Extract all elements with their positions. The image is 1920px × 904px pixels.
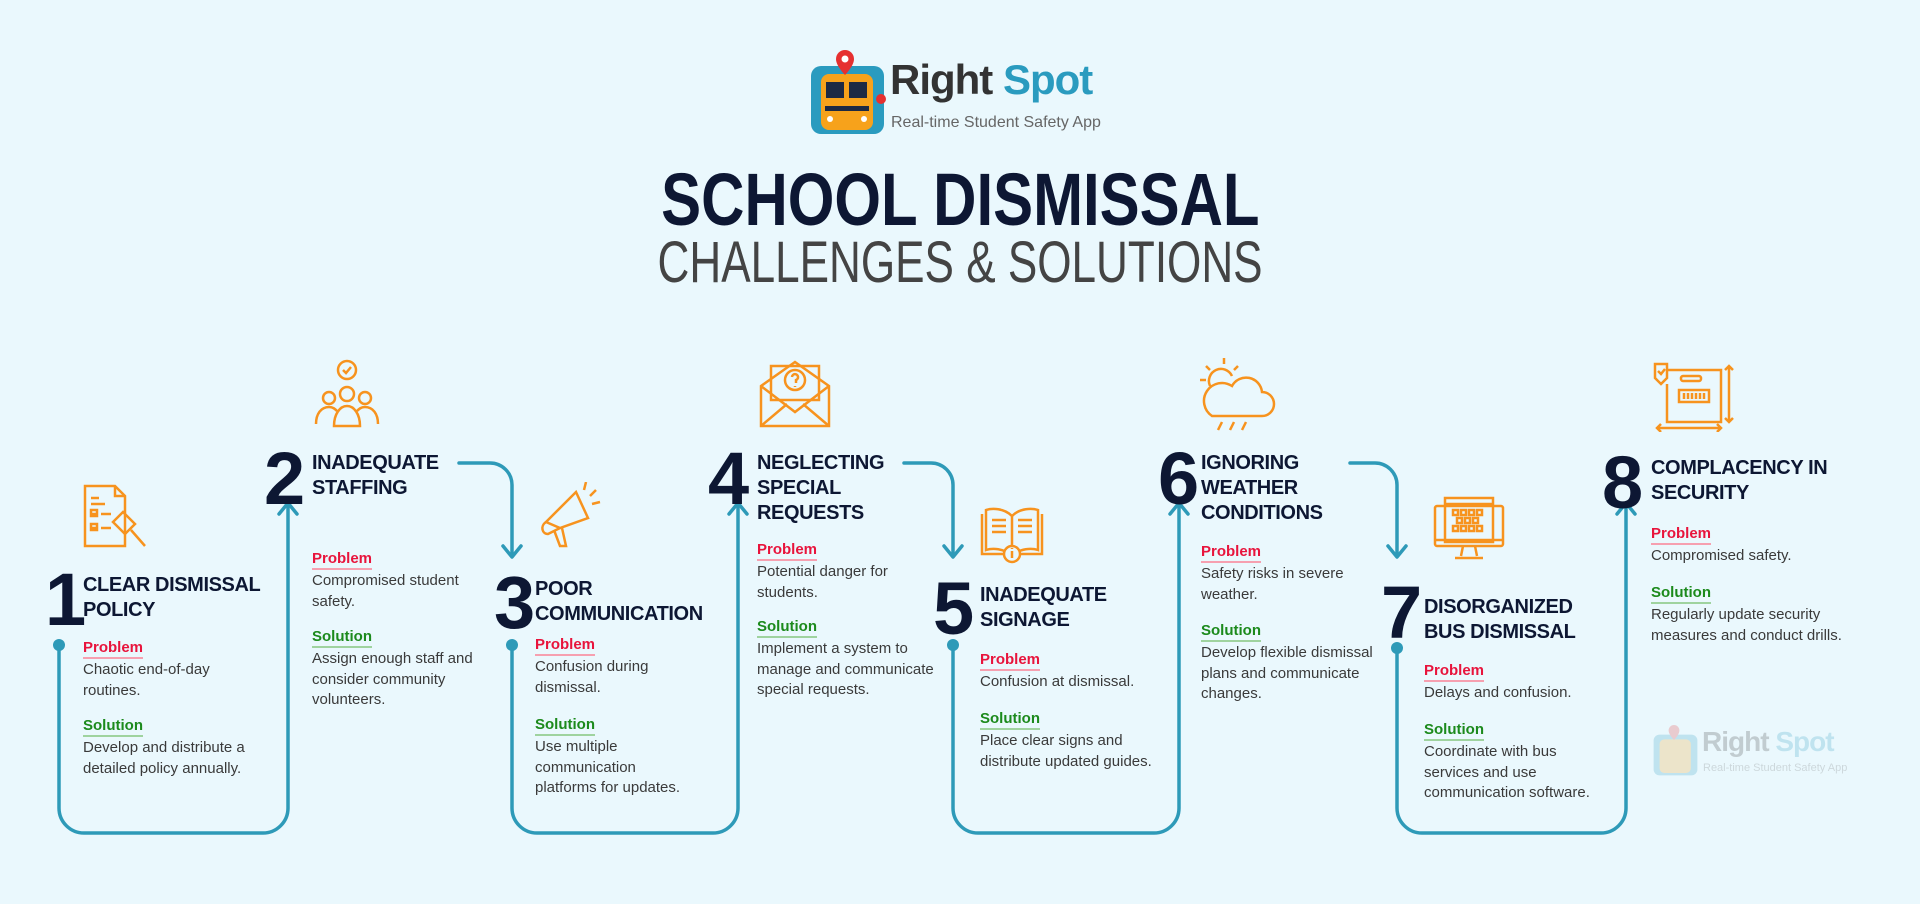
panel: 7 disorganized bus dismissal: Coordinate with bus xyxy=(1424,743,1557,760)
problem & solution xyxy=(83,639,210,698)
number 7: 7 xyxy=(1381,571,1422,654)
problem & solution xyxy=(1201,543,1344,602)
panel: 6 ignoring weather conditions: changes. xyxy=(1201,685,1262,702)
heading xyxy=(535,578,703,625)
heading xyxy=(1424,596,1576,643)
panel: 1 clear dismissal policy: Develop and distribute a xyxy=(83,739,245,756)
panel: 1 clear dismissal policy: detailed policy annually. xyxy=(83,760,241,776)
panel: 3 poor communication: Solution xyxy=(535,716,595,733)
problem & solution: Problem xyxy=(312,550,372,567)
number 4: 4 xyxy=(708,437,749,520)
panel: 5 inadequate signage: distribute updated guides. xyxy=(980,752,1152,770)
icon: team xyxy=(314,360,380,428)
watermark logo xyxy=(1654,725,1847,776)
panel: 6 ignoring weather conditions: plans and communicate xyxy=(1201,664,1359,682)
icon: policy document xyxy=(84,484,146,548)
heading: STAFFING xyxy=(312,477,407,499)
icon: envelope question xyxy=(760,360,830,428)
heading: DISORGANIZED xyxy=(1424,596,1573,618)
number 3: 3 xyxy=(494,561,535,644)
problem & solution: Safety risks in severe xyxy=(1201,565,1344,582)
problem & solution: Problem xyxy=(1201,543,1261,560)
problem & solution xyxy=(980,651,1134,690)
heading: NEGLECTING xyxy=(757,452,884,474)
watermark logo: Right Spot xyxy=(1702,726,1834,757)
panel: 8 complacency in security: measures and conduct drills. xyxy=(1651,626,1842,644)
panel: 4 neglecting special requests: special requests. xyxy=(757,681,870,698)
problem & solution: Potential danger for xyxy=(757,563,888,580)
heading: SIGNAGE xyxy=(980,609,1069,631)
heading: CLEAR DISMISSAL xyxy=(83,574,260,596)
icon: megaphone xyxy=(541,482,600,548)
subtitle: CHALLENGES & SOLUTIONS xyxy=(657,230,1263,295)
heading: WEATHER xyxy=(1201,477,1298,499)
problem & solution: Compromised safety. xyxy=(1651,547,1792,564)
problem & solution xyxy=(757,541,888,600)
problem & solution: Delays and confusion. xyxy=(1424,684,1572,701)
problem & solution xyxy=(535,636,648,696)
panel: 2 inadequate staffing: Assign enough staff and xyxy=(312,650,473,667)
panel: 4 neglecting special requests: manage and communicate xyxy=(757,660,934,678)
panel: 3 poor communication: platforms for updates. xyxy=(535,779,680,796)
panel: 5 inadequate signage: Solution xyxy=(980,710,1040,727)
brand name: Right Spot xyxy=(890,56,1092,103)
heading: POLICY xyxy=(83,599,155,621)
panel: 4 neglecting special requests: Implement a system to xyxy=(757,640,908,657)
icon: book xyxy=(980,508,1044,564)
panel: 2 inadequate staffing: Solution xyxy=(312,628,372,645)
problem & solution: weather. xyxy=(1201,586,1258,602)
number 5: 5 xyxy=(933,567,974,650)
heading: CONDITIONS xyxy=(1201,502,1323,524)
problem & solution xyxy=(312,550,459,610)
panel: 7 disorganized bus dismissal: services and use xyxy=(1424,764,1537,780)
problem & solution: Problem xyxy=(1424,662,1484,679)
panel: 4 neglecting special requests: Solution xyxy=(757,618,817,635)
panel: 6 ignoring weather conditions: Solution xyxy=(1201,622,1261,639)
panel: 2 inadequate staffing: consider community xyxy=(312,670,445,688)
heading xyxy=(1201,452,1323,524)
panel: 8 complacency in security: Solution xyxy=(1651,584,1711,601)
number 8: 8 xyxy=(1602,441,1643,524)
logo xyxy=(811,50,1101,134)
problem & solution: routines. xyxy=(83,682,141,698)
problem & solution: students. xyxy=(757,584,818,600)
tagline: Real-time Student Safety App xyxy=(891,114,1101,131)
problem & solution: Chaotic end-of-day xyxy=(83,661,210,678)
heading: INADEQUATE xyxy=(312,452,439,474)
title: SCHOOL DISMISSAL xyxy=(661,158,1259,241)
heading: SECURITY xyxy=(1651,482,1749,504)
panel: 7 disorganized bus dismissal: Solution xyxy=(1424,721,1484,738)
heading: COMPLACENCY IN xyxy=(1651,457,1827,479)
heading xyxy=(757,452,884,524)
number 1: 1 xyxy=(45,558,86,641)
panel: 6 ignoring weather conditions xyxy=(1158,358,1373,702)
icon: security panel xyxy=(1654,362,1734,432)
heading: IGNORING xyxy=(1201,452,1299,474)
panel: 2 inadequate staffing xyxy=(264,360,473,708)
panel: 8 complacency in security: Regularly update security xyxy=(1651,606,1820,623)
heading: REQUESTS xyxy=(757,502,864,524)
heading: INADEQUATE xyxy=(980,584,1107,606)
heading: SPECIAL xyxy=(757,477,841,499)
problem & solution: safety. xyxy=(312,592,355,610)
panel: 7 disorganized bus dismissal: communication software. xyxy=(1424,784,1590,801)
panel: 2 inadequate staffing: volunteers. xyxy=(312,691,385,708)
panel: 5 inadequate signage: Place clear signs and xyxy=(980,732,1123,749)
problem & solution: Problem xyxy=(980,651,1040,668)
heading: POOR xyxy=(535,578,592,600)
panel: 1 clear dismissal policy xyxy=(45,484,260,776)
heading xyxy=(83,574,260,621)
panel: 1 clear dismissal policy: Solution xyxy=(83,717,143,734)
panel: 6 ignoring weather conditions: Develop flexible dismissal xyxy=(1201,644,1373,661)
panel: 7 disorganized bus dismissal xyxy=(1381,496,1590,801)
heading xyxy=(1651,457,1827,504)
problem & solution: Problem xyxy=(757,541,817,558)
panel: 5 inadequate signage xyxy=(933,508,1152,770)
problem & solution: dismissal. xyxy=(535,678,601,696)
panel: 4 neglecting special requests xyxy=(708,360,934,698)
problem & solution: Problem xyxy=(535,636,595,653)
problem & solution xyxy=(1424,662,1572,701)
problem & solution: Problem xyxy=(1651,525,1711,542)
number 2: 2 xyxy=(264,437,305,520)
panel: 3 poor communication: Use multiple xyxy=(535,738,618,755)
number 6: 6 xyxy=(1158,437,1199,520)
icon: bus logo xyxy=(811,50,886,134)
problem & solution xyxy=(1651,525,1792,564)
panel: 3 poor communication xyxy=(494,482,703,796)
problem & solution: Confusion at dismissal. xyxy=(980,673,1134,690)
watermark logo: Real-time Student Safety App xyxy=(1703,762,1847,774)
panel: 3 poor communication: communication xyxy=(535,758,636,776)
problem & solution: Problem xyxy=(83,639,143,656)
heading: BUS DISMISSAL xyxy=(1424,621,1575,643)
panel: 8 complacency in security xyxy=(1602,362,1842,644)
icon: weather xyxy=(1200,358,1276,430)
heading: COMMUNICATION xyxy=(535,603,703,625)
icon: monitor xyxy=(1434,496,1504,560)
heading xyxy=(980,584,1107,631)
heading xyxy=(312,452,439,499)
problem & solution: Confusion during xyxy=(535,658,648,675)
problem & solution: Compromised student xyxy=(312,572,459,589)
